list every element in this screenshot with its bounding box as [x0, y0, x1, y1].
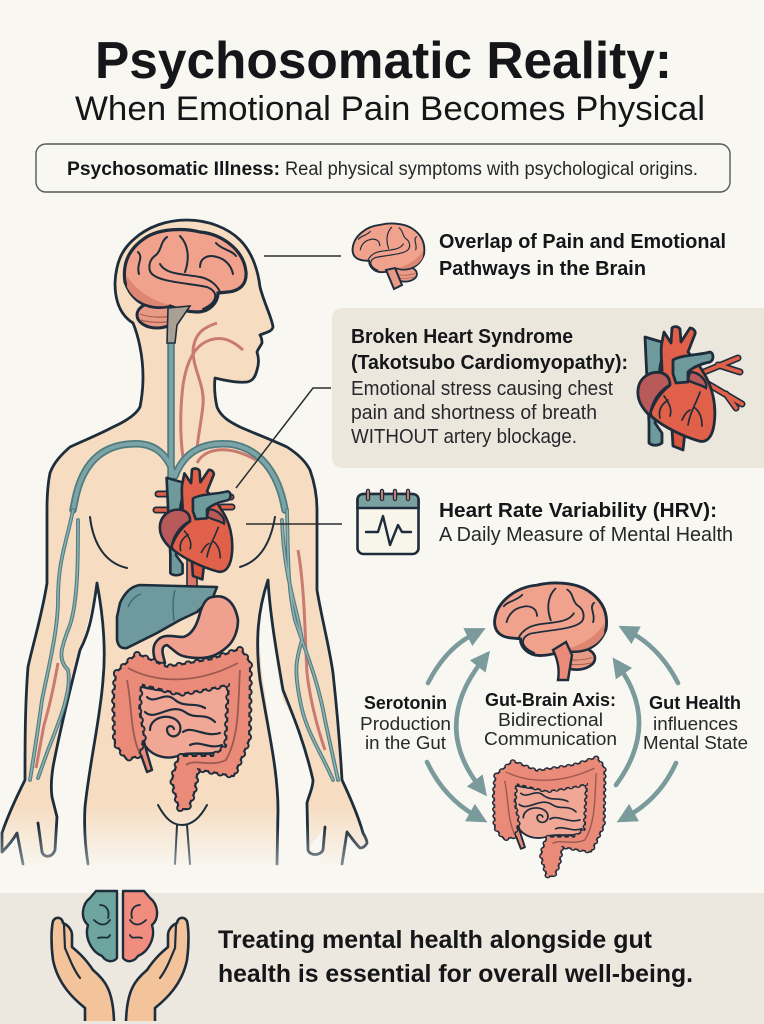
panel: broken heart background: [332, 308, 764, 468]
icon: brain: [353, 224, 424, 289]
conclusion text: [218, 926, 693, 988]
body intestines: [115, 650, 249, 808]
text: broken heart syndrome: pain and shortness of breath: [351, 402, 597, 424]
text: heart rate variability: A Daily Measure of Mental Health: [439, 524, 733, 546]
icon: hands holding brain: [52, 891, 188, 1021]
stomach: [153, 596, 238, 663]
panel: conclusion band: [0, 891, 764, 1024]
arrows: [427, 632, 678, 816]
esophagus: [187, 560, 197, 590]
label: serotonin: Serotonin: [364, 693, 447, 713]
label: gut health: Mental State: [643, 733, 748, 753]
text: broken heart syndrome: Emotional stress causing chest: [351, 378, 613, 400]
label: gut-brain axis: Gut-Brain Axis:: [485, 690, 616, 710]
label: gut health: Gut Health: [649, 693, 741, 713]
teal vessels: spine, arches and arms: [30, 343, 338, 780]
label: serotonin: Production: [360, 714, 451, 734]
text: broken heart syndrome: Broken Heart Syndrome: [351, 326, 573, 348]
label: gut-brain axis: [484, 690, 617, 749]
diagram: gut-brain axis: [360, 583, 748, 875]
chest and pelvis lines: [90, 517, 275, 864]
body heart: [156, 468, 232, 580]
heading: overlap: Overlap of Pain and Emotional: [439, 231, 726, 253]
body silhouette: [2, 220, 367, 866]
title: [75, 32, 705, 128]
label: gut-brain axis: Bidirectional: [498, 710, 603, 730]
liver: [117, 585, 217, 648]
text: broken heart syndrome: WITHOUT artery blockage.: [351, 426, 577, 448]
brain: [495, 583, 607, 680]
body brain: [124, 230, 246, 343]
connector lines: [236, 256, 342, 524]
definition callout: Real physical symptoms with psychological origins.: [285, 159, 698, 180]
label: serotonin: in the Gut: [365, 733, 446, 753]
icon: calendar with ECG: [358, 491, 418, 554]
text: heart rate variability: Heart Rate Variability (HRV):: [439, 500, 717, 522]
definition callout: Psychosomatic Illness:: [67, 159, 280, 180]
heading: overlap: [439, 231, 726, 280]
conclusion text: health is essential for overall well-being.: [218, 960, 693, 988]
label: gut health: [643, 693, 748, 753]
text: broken heart syndrome: (Takotsubo Cardiomyopathy):: [351, 352, 628, 374]
gut: [495, 758, 603, 875]
body outline: [2, 220, 367, 864]
item: overlap of pain and emotion: [353, 224, 726, 289]
conclusion text: Treating mental health alongside gut: [218, 926, 653, 954]
definition callout: [36, 144, 730, 192]
figure: human body with organs: [2, 220, 367, 866]
label: gut-brain axis: Communication: [484, 729, 617, 749]
icon: heart: [638, 327, 742, 450]
text: broken heart syndrome: [351, 326, 628, 448]
heading: overlap: Pathways in the Brain: [439, 258, 646, 280]
title: When Emotional Pain Becomes Physical: [75, 90, 705, 128]
red vessels: neck, chest and arms: [36, 323, 325, 768]
text: heart rate variability: [439, 500, 733, 546]
label: gut health: influences: [653, 714, 738, 734]
label: serotonin: [360, 693, 451, 753]
title: Psychosomatic Reality:: [95, 32, 672, 90]
